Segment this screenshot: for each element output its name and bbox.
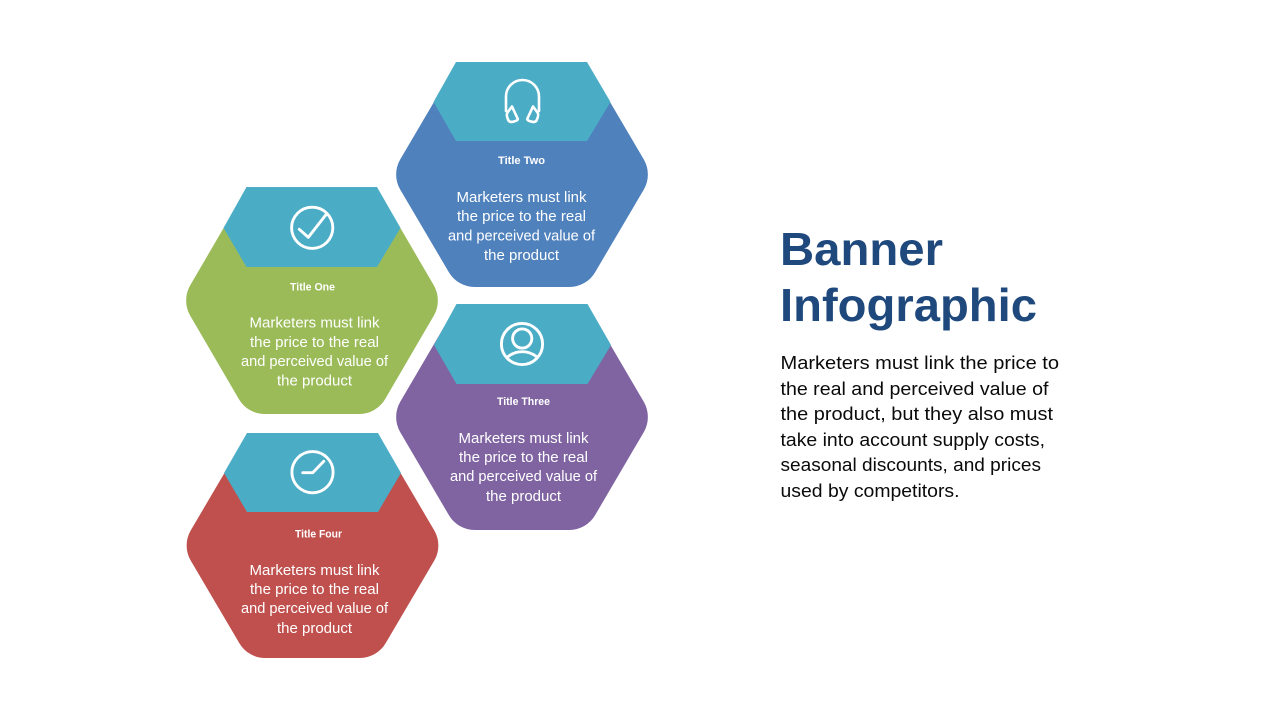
text block: Title Three description: the price to the real [459,450,588,466]
text block: Title Two description: the product [484,248,559,264]
heading: Title One: Title One [290,282,335,294]
text block: description: used by competitors. [780,480,960,501]
text block: Title Three description: Marketers must link [458,431,589,447]
panel: Title Three hexagon [396,304,648,530]
panel: Title One hexagon [186,187,438,414]
hexagon body: green [186,187,438,414]
icon banner: Title Four [224,433,401,512]
heading: Title Three: Title Three [497,396,550,408]
icon banner: Title Three [434,304,611,384]
text block: description: seasonal discounts, and prices [780,454,1041,475]
heading: Title Two: Title Two [498,155,545,167]
text block: Title Three description: and perceived value of [450,469,598,485]
text block: Title One description: and perceived value of [241,354,389,370]
panel: Title Four hexagon [187,433,438,658]
text block: Title Three description [450,431,598,505]
hexagon body: purple [396,304,648,530]
text block: Title Two description [448,190,596,264]
text block: Title Four description: the price to the real [250,582,379,598]
icon: user in circle [501,323,543,365]
title: Infographic [780,279,1037,331]
text block: description: the product, but they also must [780,403,1053,424]
icon banner: Title One [224,187,400,267]
icon: headphones [506,80,539,122]
icon: clock [292,452,333,493]
text block: description: the real and perceived value of [780,378,1049,399]
hexagon body: blue [396,62,648,287]
text block: Title One description: the price to the real [250,335,379,351]
text block: description: take into account supply costs, [780,429,1045,450]
text block: Title Two description: Marketers must link [456,190,587,206]
title [780,223,1037,331]
text block: Title Four description: the product [277,621,352,637]
text block: Title Four description [241,563,389,637]
text block: Title Three description: the product [486,489,561,505]
text block: description [780,352,1059,501]
hexagon body: red [187,433,438,658]
heading: Title Four: Title Four [295,529,343,541]
text block: Title Two description: and perceived value of [448,228,596,244]
text block: Title One description: Marketers must link [250,316,380,332]
text block: Title One description: the product [277,374,352,390]
text block: Title Four description: Marketers must link [250,563,380,579]
icon banner: Title Two [434,62,610,141]
text block: Title Two description: the price to the real [457,209,586,225]
icon: check mark in circle [292,207,333,248]
text block: description: Marketers must link the price to [780,352,1059,373]
text block: Title One description [241,316,389,390]
title: Banner [780,223,943,275]
panel: Title Two hexagon [396,62,648,287]
text block: Title Four description: and perceived value of [241,601,389,617]
